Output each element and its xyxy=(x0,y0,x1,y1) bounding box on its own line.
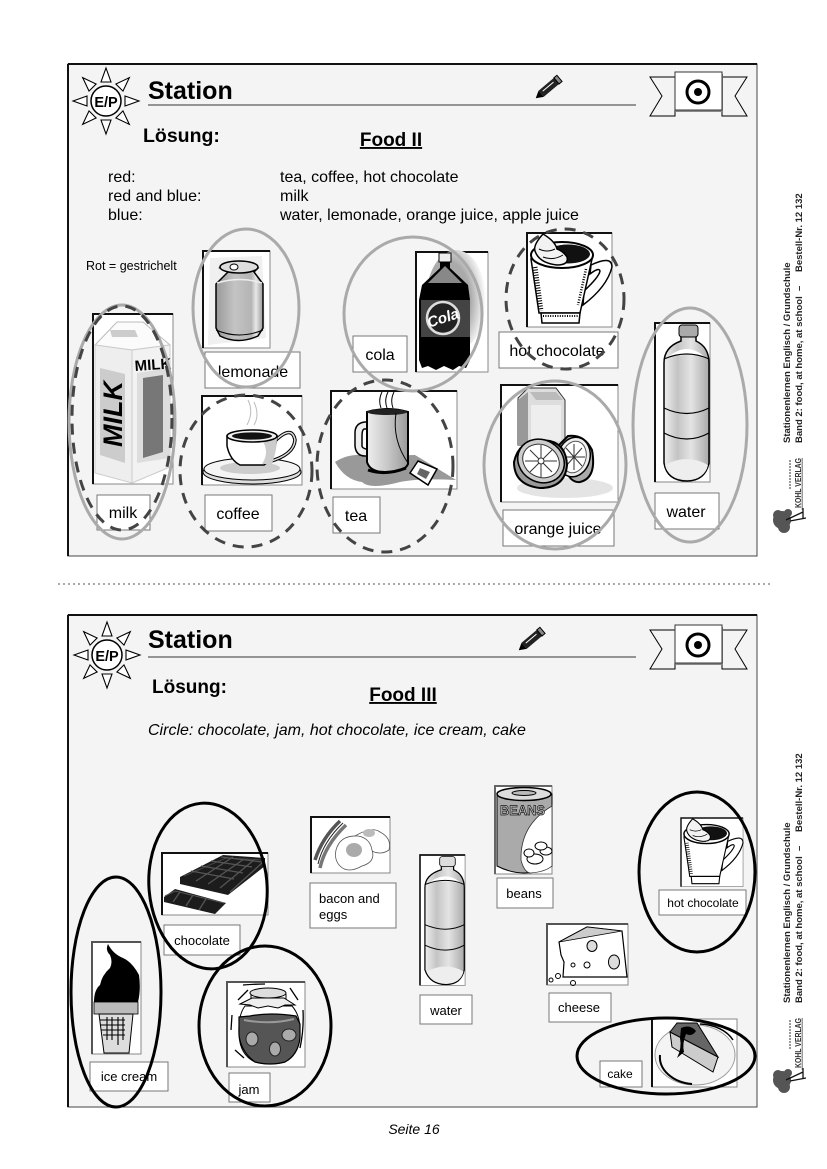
label: cola xyxy=(353,336,407,372)
side text: bottom panel publisher info: Band 2: food, at home, at school xyxy=(794,856,805,1003)
label: milk xyxy=(97,495,150,530)
logo: Kohl Verlag bottom: KOHL VERLAG xyxy=(794,1018,803,1068)
item: orange juice xyxy=(501,385,618,502)
icon: E/P sun badge xyxy=(73,68,139,134)
label: chocolate xyxy=(164,925,240,955)
side text: top panel publisher info: Stationenlernen Englisch / Grundschule xyxy=(782,262,793,443)
item: cola bottle: Cola xyxy=(425,305,461,332)
label: water xyxy=(655,493,719,529)
item: cake xyxy=(652,1019,737,1087)
text block: colour answers xyxy=(108,169,579,224)
label: water xyxy=(420,995,472,1024)
label: cake xyxy=(600,1061,642,1087)
text: legend: Rot = gestrichelt xyxy=(86,259,177,273)
item: lemonade can xyxy=(203,251,270,348)
label: ice cream xyxy=(90,1062,168,1091)
label: bacon and eggs: bacon and xyxy=(319,891,380,906)
heading: Station: Station xyxy=(148,626,233,654)
icon: ribbon badge with target xyxy=(650,625,747,669)
label: orange juice xyxy=(503,510,614,546)
label: ice cream: ice cream xyxy=(101,1069,157,1084)
logo: Kohl Verlag top: KOHL VERLAG xyxy=(794,458,803,508)
text: answer sentence: Circle: chocolate, jam, hot chocolate, ice cream, cake xyxy=(148,722,526,739)
item: beans can xyxy=(495,786,552,874)
text block: colour answers: milk xyxy=(280,188,309,205)
icon: E/P sun badge: E/P xyxy=(95,649,119,665)
label: water: water xyxy=(665,504,706,521)
text: Lösung: Lösung: xyxy=(143,125,220,147)
logo: Kohl Verlag bottom xyxy=(773,1018,806,1093)
label: orange juice: orange juice xyxy=(514,521,602,538)
item: water bottle xyxy=(655,323,710,482)
label: coffee: coffee xyxy=(216,506,260,523)
icon: pencil xyxy=(533,75,562,101)
label: milk: milk xyxy=(109,505,138,522)
label: coffee xyxy=(205,495,272,531)
heading: Food III: Food III xyxy=(369,685,437,706)
side text: top panel publisher info xyxy=(782,193,805,443)
label: tea xyxy=(333,497,380,533)
side text: top panel publisher info: Bestell-Nr. 12 132 xyxy=(794,193,805,272)
item: cola bottle xyxy=(416,250,488,372)
label: lemonade xyxy=(205,352,300,388)
label: hot chocolate xyxy=(659,890,746,915)
heading: Station: Station xyxy=(148,77,233,105)
label: hot chocolate: hot chocolate xyxy=(667,896,739,910)
label: bacon and eggs: eggs xyxy=(319,907,348,922)
panel: station food III xyxy=(68,615,757,1107)
item: beans can: BEANS xyxy=(500,802,545,818)
item: water bottle xyxy=(420,855,465,985)
item: chocolate xyxy=(162,853,268,915)
text: Lösung: Lösung: xyxy=(152,677,227,698)
label: tea: tea xyxy=(345,508,367,525)
item: milk carton: MILK xyxy=(134,355,172,375)
icon: E/P sun badge xyxy=(74,622,140,688)
panel: station food II xyxy=(68,64,757,556)
label: jam xyxy=(229,1073,270,1102)
divider: dotted cut line xyxy=(58,583,770,585)
text block: colour answers: tea, coffee, hot chocolate xyxy=(280,169,459,186)
label: beans: beans xyxy=(506,886,542,901)
text block: colour answers: red and blue: xyxy=(108,188,201,205)
item: milk carton: MILK xyxy=(98,379,128,447)
item: coffee cup xyxy=(202,396,302,485)
item: jam xyxy=(227,982,305,1067)
label: hot chocolate xyxy=(499,332,618,368)
label: cheese: cheese xyxy=(558,1000,600,1015)
label: cake: cake xyxy=(607,1067,633,1081)
label: cola: cola xyxy=(365,347,395,364)
side text: top panel publisher info: – xyxy=(794,286,805,291)
item: hot chocolate mug xyxy=(681,818,743,887)
label: chocolate: chocolate xyxy=(174,933,230,948)
text block: colour answers: blue: xyxy=(108,207,143,224)
icon: ribbon badge with target xyxy=(650,72,747,116)
side text: bottom panel publisher info: – xyxy=(794,846,805,851)
item: cheese xyxy=(547,924,628,986)
side text: bottom panel publisher info: Stationenlernen Englisch / Grundschule xyxy=(782,822,793,1003)
label: beans xyxy=(497,878,553,908)
side text: bottom panel publisher info xyxy=(782,753,805,1003)
item: tea mug xyxy=(331,391,457,489)
icon: pencil xyxy=(516,627,545,653)
label: jam: jam xyxy=(238,1082,259,1097)
item: ice cream xyxy=(92,942,141,1054)
side text: bottom panel publisher info: Bestell-Nr. 12 132 xyxy=(794,753,805,832)
label: cheese xyxy=(549,993,611,1022)
label: water: water xyxy=(429,1003,463,1018)
text block: colour answers: water, lemonade, orange juice, apple juice xyxy=(279,207,579,224)
item: milk carton xyxy=(93,314,173,484)
circles: correct answers xyxy=(71,792,755,1107)
circles: blue answers (solid) xyxy=(69,229,747,549)
side text: top panel publisher info: Band 2: food, at home, at school xyxy=(794,296,805,443)
item: bacon and eggs xyxy=(311,817,390,873)
label: lemonade: lemonade xyxy=(218,364,288,381)
heading: Food II: Food II xyxy=(360,130,422,151)
text block: colour answers: red: xyxy=(108,169,136,186)
circles: red answers (dashed) xyxy=(72,229,624,552)
logo: Kohl Verlag top xyxy=(773,458,806,533)
footer: page number: Seite 16 xyxy=(388,1121,440,1137)
icon: E/P sun badge: E/P xyxy=(94,95,118,111)
label: hot chocolate: hot chocolate xyxy=(509,343,605,360)
label: bacon and eggs xyxy=(310,883,396,928)
item: hot chocolate mug xyxy=(527,233,612,327)
